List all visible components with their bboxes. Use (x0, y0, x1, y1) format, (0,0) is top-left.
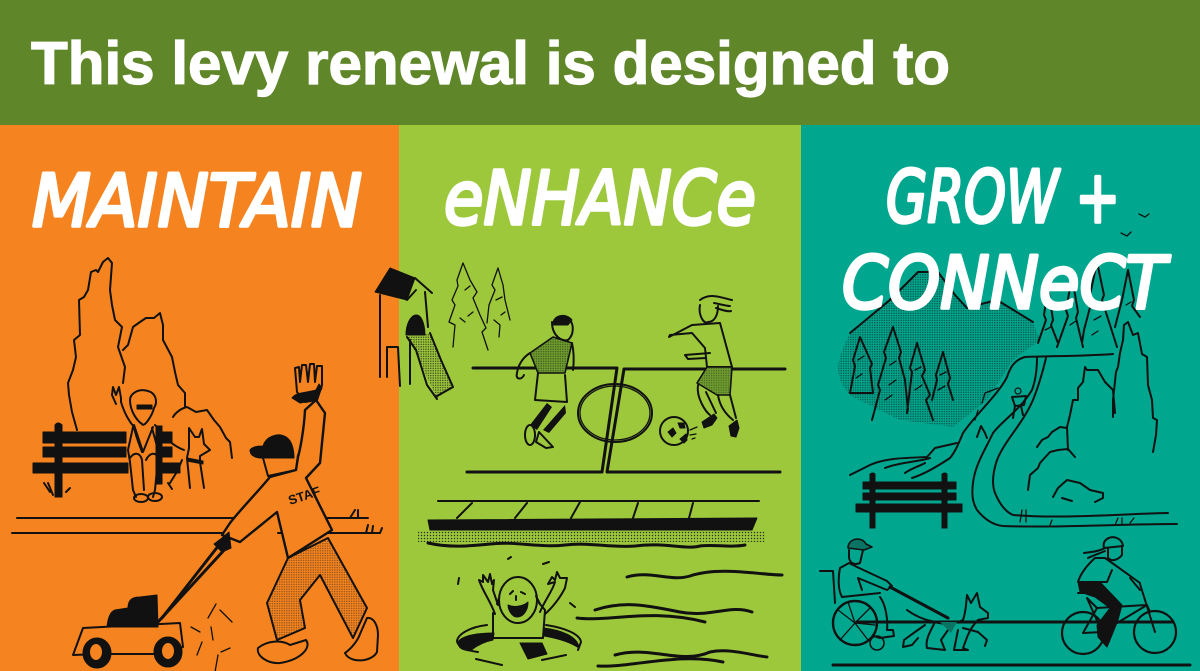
ground lines (833, 622, 1190, 665)
ground lines (12, 510, 382, 533)
icon: river and hillside (850, 354, 1113, 478)
icon: pine trees (449, 263, 510, 350)
heading: maintain: MAINTAIN (32, 159, 362, 243)
icon: birds (1121, 214, 1149, 236)
title: This levy renewal is designed to (31, 30, 950, 97)
icon: hillside trees and bushes (1028, 322, 1157, 502)
heading: connect: CONNeCT (842, 241, 1171, 325)
icon: park bench (856, 473, 962, 528)
header banner (0, 0, 1200, 125)
icon: forest right (1038, 262, 1140, 347)
icon: right soccer player (669, 296, 739, 437)
panel: enhance (375, 125, 801, 671)
icon: soccer field (467, 368, 785, 472)
icon: swimmer in inner tube (456, 557, 782, 666)
icon: person mowing lawn: STAF (286, 483, 322, 508)
trousers (267, 538, 367, 640)
icon: cyclist (1062, 537, 1176, 654)
icon: person mowing lawn (73, 364, 378, 671)
icon: hiker on path (1012, 388, 1026, 418)
icon: wheelchair user (820, 539, 948, 650)
icon: soccer ball (660, 417, 697, 445)
heading: enhance: eNHANCe (444, 156, 756, 242)
shirt (222, 400, 332, 558)
icon: dock (418, 501, 765, 547)
icon: bench with waving person and dog (33, 387, 210, 502)
icon: forest left (850, 327, 953, 420)
icon: guide dog (903, 593, 988, 650)
icon: left soccer player (517, 315, 574, 448)
panel: maintain (0, 125, 399, 671)
icon: mountain with halftone (838, 272, 1040, 427)
icon: trees behind bench (68, 258, 232, 458)
panel: grow and connect (801, 125, 1200, 671)
icon: playground slide (375, 268, 453, 399)
heading: grow: GROW + (886, 155, 1120, 239)
icon: winding path (972, 358, 1177, 527)
